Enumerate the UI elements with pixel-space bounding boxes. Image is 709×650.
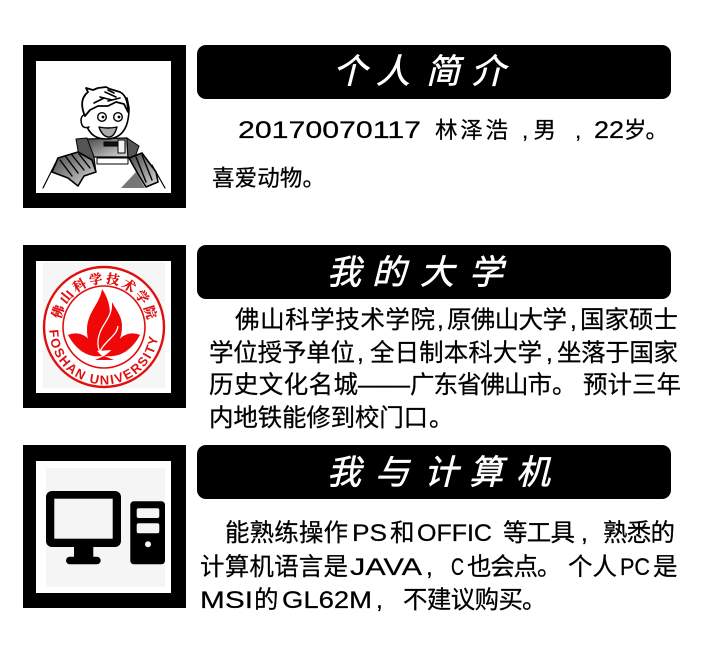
text block: computer skills: 熟悉的: [603, 519, 675, 547]
icon: computer tower: [130, 501, 165, 564]
heading banner: 个人简介: 个人简介: [333, 53, 509, 91]
text block: profile: ,男: [522, 118, 556, 143]
text block: computer skills: 不建议购买: [403, 586, 523, 614]
heading banner: 我的大学: 我的大学: [327, 254, 507, 292]
text block: university description: ,: [570, 307, 577, 334]
text block: profile: 20170070117: [238, 117, 421, 144]
text block: university description: 全日制本科大学: [370, 339, 542, 367]
icon: armored boy: [43, 87, 165, 188]
text block: computer skills: 能熟练操作: [225, 519, 348, 547]
text block: university description: 国家硕士: [580, 306, 678, 334]
text block: university description: 预计三年: [583, 371, 681, 399]
text block: computer skills: JAVA: [350, 554, 422, 581]
icon: university seal: [42, 266, 166, 388]
text block: computer skills: 和: [390, 519, 414, 547]
text block: profile: 22: [594, 117, 624, 144]
text block: computer skills: 也会点: [467, 553, 538, 581]
text block: computer skills: PC: [620, 554, 650, 581]
text block: profile: 喜爱动物。: [212, 166, 325, 191]
icon: monitor: [46, 491, 121, 564]
text block: university description: [209, 306, 681, 432]
text block: university description: ——: [358, 372, 411, 399]
icon frame with desktop computer: [23, 445, 186, 608]
text block: university description: 。: [552, 372, 576, 399]
text block: computer skills: OFFIC: [417, 520, 492, 547]
text block: university description: 学位授予单位: [209, 339, 355, 367]
text block: profile: 岁。: [624, 118, 668, 143]
text block: university description: 原佛山大学: [447, 306, 567, 334]
text block: university description: 历史文化名城: [209, 371, 358, 399]
text block: computer skills: 计算机语言是: [200, 553, 348, 581]
text block: computer skills: 个人: [568, 554, 617, 581]
text block: computer skills: [200, 519, 678, 614]
text block: university description: ,: [437, 307, 444, 334]
text block: university description: 广东省佛山市: [410, 371, 552, 399]
text block: computer skills: GL62M: [282, 587, 372, 614]
text block: computer skills: MSI: [200, 587, 253, 614]
text block: computer skills: 。: [537, 554, 562, 581]
text block: university description: 坐落于国家: [557, 339, 678, 367]
heading banner: 我与计算机: 我与计算机: [327, 454, 551, 492]
portrait frame with cartoon boy: [23, 45, 186, 208]
text block: computer skills: ,: [426, 554, 433, 581]
panel: me and computers: [23, 445, 678, 614]
icon: university seal: FOSHAN UNIVERSITY: [49, 330, 158, 385]
text block: university description: 佛山科学技术学院: [235, 306, 435, 334]
text block: profile: [212, 117, 668, 191]
text block: computer skills: ,: [581, 520, 588, 547]
text block: university description: 。: [429, 405, 454, 432]
text block: profile: 林泽浩: [435, 118, 508, 143]
text block: computer skills: 是: [653, 554, 678, 581]
icon: university seal: 佛山科学技术学院: [50, 272, 157, 320]
text block: university description: 内地铁能修到校门口: [209, 404, 428, 432]
text block: computer skills: 的: [254, 586, 278, 614]
panel: personal profile: [23, 45, 671, 208]
logo frame with Foshan University seal: [23, 245, 186, 408]
text block: profile: ,: [575, 118, 581, 143]
text block: computer skills: ,: [376, 587, 383, 614]
heading banner: 我的大学: [197, 245, 671, 299]
panel: my university: [23, 245, 681, 432]
text block: university description: ,: [546, 340, 553, 367]
heading banner: 个人简介: [197, 45, 671, 99]
text block: computer skills: 。: [522, 587, 546, 614]
text block: computer skills: PS: [352, 520, 387, 547]
text block: computer skills: C: [451, 554, 464, 581]
heading banner: 我与计算机: [197, 445, 671, 499]
text block: university description: ,: [357, 340, 364, 367]
text block: computer skills: 等工具: [503, 519, 575, 547]
